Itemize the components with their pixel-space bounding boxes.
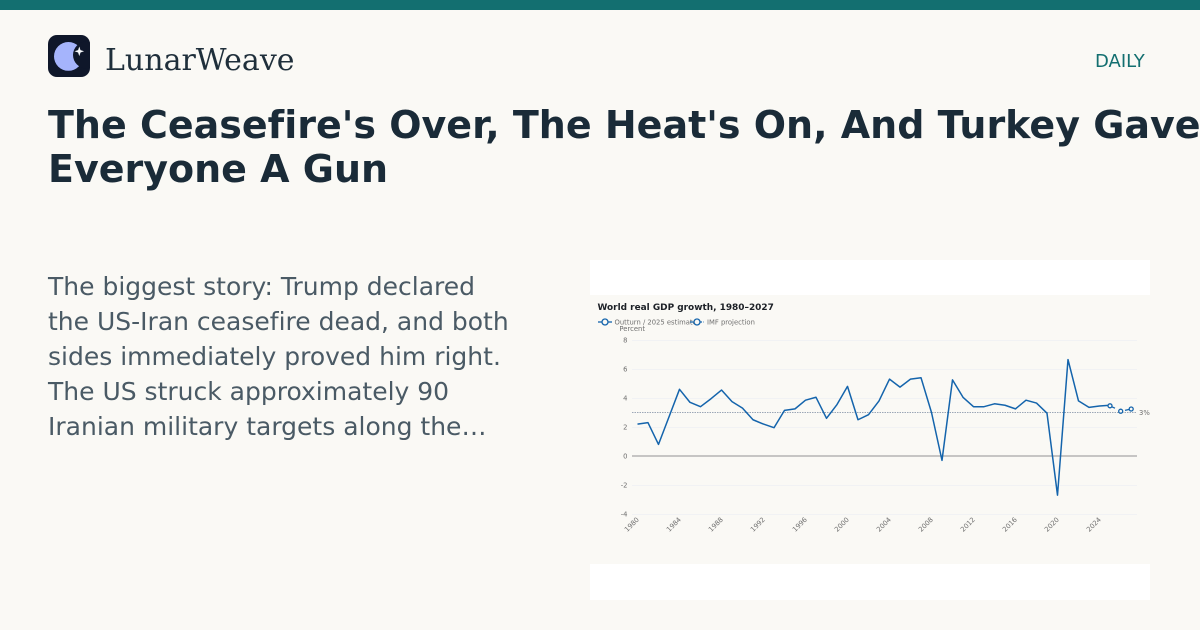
chart: world real GDP growth — [590, 295, 1150, 564]
panel: chart image — [590, 260, 1150, 600]
3 percent reference line: 3% — [1139, 409, 1150, 417]
icon: moon logo — [48, 35, 90, 77]
summary text: the US-Iran ceasefire dead, and both — [48, 307, 509, 336]
chart title: World real GDP growth, 1980–2027 — [598, 303, 774, 313]
summary text: The biggest story: Trump declared — [48, 272, 475, 301]
summary text — [48, 272, 509, 441]
x axis labels: 2020 — [1043, 516, 1061, 534]
top accent bar — [0, 0, 1200, 10]
y axis: -4 — [621, 510, 628, 518]
legend: IMF projection — [707, 318, 755, 326]
y axis: 2 — [623, 424, 628, 432]
summary text: The US struck approximately 90 — [48, 377, 449, 406]
x axis labels: 2004 — [875, 516, 893, 534]
y axis: 0 — [623, 452, 628, 460]
legend — [598, 318, 755, 326]
y axis: 4 — [623, 394, 628, 402]
x axis labels: 1992 — [749, 516, 767, 534]
zero line — [632, 455, 1137, 457]
category label: DAILY — [1095, 51, 1145, 72]
x axis labels — [623, 516, 1103, 534]
title: The Ceasefire's Over, The Heat's On, And Turkey Gave — [48, 103, 1200, 147]
y axis: -2 — [621, 482, 628, 490]
y axis — [619, 325, 645, 518]
summary text: Iranian military targets along the… — [48, 412, 486, 441]
y axis: 6 — [623, 366, 628, 374]
x axis labels: 1984 — [665, 516, 683, 534]
projection line and markers — [1108, 404, 1133, 413]
grid lines — [632, 340, 1137, 514]
x axis labels: 2000 — [833, 516, 851, 534]
growth line — [638, 360, 1110, 495]
legend: Outturn / 2025 estimate — [614, 318, 697, 326]
x axis labels: 2024 — [1085, 516, 1103, 534]
brand name: LunarWeave — [105, 43, 295, 78]
x axis labels: 2016 — [1001, 516, 1019, 534]
summary text: sides immediately proved him right. — [48, 342, 501, 371]
title: Everyone A Gun — [48, 147, 388, 191]
y axis: 8 — [623, 336, 628, 344]
title — [48, 103, 1200, 191]
x axis labels: 1996 — [791, 516, 809, 534]
x axis labels: 1988 — [707, 516, 725, 534]
x axis labels: 2012 — [959, 516, 977, 534]
x axis labels: 2008 — [917, 516, 935, 534]
x axis labels: 1980 — [623, 516, 641, 534]
y axis: Percent — [619, 325, 645, 333]
